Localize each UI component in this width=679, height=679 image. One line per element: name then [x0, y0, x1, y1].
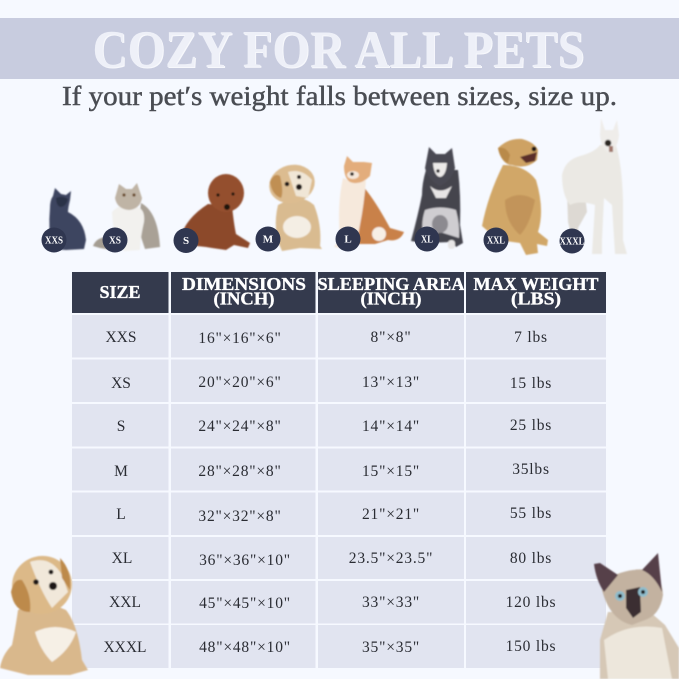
row XS: XS [111, 375, 131, 392]
table header: SIZE [100, 282, 140, 302]
title: COZY FOR ALL PETS [92, 21, 584, 79]
pet: XS fluffy cat [93, 183, 160, 251]
table header: (INCH) [360, 288, 422, 308]
size badge XL: XL [421, 234, 433, 246]
row L: 21"×21" [362, 506, 420, 523]
row S: S [117, 418, 125, 435]
title banner [0, 18, 679, 79]
pet: M havanese [265, 160, 322, 251]
row XS: 15 lbs [510, 375, 552, 392]
size badge L: L [344, 234, 352, 246]
row XXS: XXS [105, 329, 137, 346]
row XXS: 8"×8" [371, 329, 411, 346]
pet: XXL golden retriever [482, 139, 548, 255]
row XXXL: 48"×48"×10" [199, 639, 291, 656]
row XL: 36"×36"×10" [199, 552, 291, 569]
row XXS: 7 lbs [514, 329, 548, 346]
row M: 28"×28"×8" [198, 463, 282, 480]
size badge XXL: XXL [487, 234, 505, 246]
row L [116, 505, 552, 525]
table header: SLEEPING AREA [318, 274, 465, 294]
size badge S [174, 228, 198, 253]
row M: 15"×15" [362, 463, 420, 480]
row XS: 13"×13" [362, 374, 420, 391]
row XXL [109, 594, 556, 612]
row S: 25 lbs [510, 417, 552, 434]
row S: 14"×14" [362, 418, 420, 435]
row M: M [114, 463, 128, 480]
row XS [111, 374, 552, 392]
photo: havanese dog [0, 549, 88, 675]
row XXXL: 35"×35" [362, 639, 420, 656]
pet: XXS grey cat [49, 188, 86, 250]
pet: XXXL white dane [562, 118, 627, 254]
size badge XXXL [560, 228, 584, 254]
table header: (LBS) [511, 288, 561, 308]
size badge XXXL: XXXL [560, 236, 584, 248]
table rows background [72, 315, 606, 668]
size badge L [336, 226, 360, 252]
row XL: 23.5"×23.5" [349, 550, 433, 567]
row XXL: 45"×45"×10" [199, 595, 291, 612]
row XXS [105, 329, 548, 347]
row XXXL [103, 638, 556, 656]
size badge M: M [263, 234, 274, 246]
table header: DIMENSIONS [182, 274, 306, 294]
row XL: XL [112, 550, 132, 567]
size badge XXL [484, 228, 508, 252]
size badge S: S [183, 235, 189, 247]
row S: 24"×24"×8" [198, 418, 282, 435]
table header [72, 272, 606, 313]
pet: L shiba [334, 156, 404, 250]
row XS: 20"×20"×6" [198, 374, 282, 391]
row L: 55 lbs [510, 505, 552, 522]
subtitle: If your pet′s weight falls between sizes, size up. [62, 81, 617, 111]
photo: siamese cat [594, 553, 679, 679]
row XL: 80 lbs [510, 550, 552, 567]
row XXL: XXL [109, 594, 141, 611]
row XXXL: XXXL [103, 639, 147, 656]
row XXL: 33"×33" [362, 594, 420, 611]
size badge M [256, 226, 280, 252]
pet: XL husky [411, 147, 463, 249]
size badge XXS [42, 228, 66, 252]
size badge XS [102, 228, 128, 252]
row L: 32"×32"×8" [198, 508, 282, 525]
row XXL: 120 lbs [506, 594, 556, 611]
row S [117, 417, 552, 435]
table header: (INCH) [214, 288, 275, 308]
pet: S brown poodle [180, 174, 250, 250]
size table [72, 272, 606, 668]
row XL [112, 550, 552, 569]
pet size lineup [42, 118, 627, 255]
row XXXL: 150 lbs [506, 638, 556, 655]
size badge XXS: XXS [45, 234, 63, 246]
row M: 35lbs [512, 461, 550, 478]
row L: L [116, 506, 126, 523]
row XXS: 16"×16"×6" [198, 330, 282, 347]
row M [114, 461, 550, 480]
size badge XL [414, 226, 440, 252]
table header: MAX WEIGHT [474, 274, 599, 294]
size badge XS: XS [109, 234, 121, 246]
